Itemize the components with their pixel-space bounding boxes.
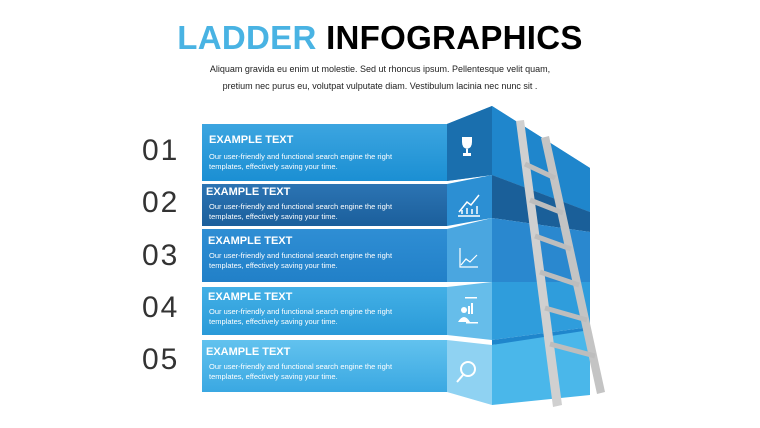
block 5: [447, 330, 590, 405]
bar 5: templates, effectively saving your time.: [209, 372, 338, 381]
bar 5: EXAMPLE TEXT: [206, 346, 290, 358]
icon: trophy: [462, 137, 472, 156]
bar 4: [202, 287, 447, 335]
number 03: 03: [142, 239, 179, 272]
bar 3: EXAMPLE TEXT: [208, 235, 292, 247]
number 01: 01: [142, 134, 179, 167]
bar 3: [202, 229, 447, 282]
bar 4: EXAMPLE TEXT: [208, 291, 292, 303]
bar 1: templates, effectively saving your time.: [209, 162, 338, 171]
ladder: [516, 120, 605, 407]
subtitle: Aliquam gravida eu enim ut molestie. Sed ut rhoncus ipsum. Pellentesque velit quam,: [210, 64, 550, 74]
bar 2: [202, 184, 447, 226]
bar 3: Our user-friendly and functional search engine the right: [209, 251, 392, 260]
icon: presenter: [458, 297, 478, 324]
subtitle: [210, 64, 550, 91]
block 2: [447, 175, 590, 232]
number 04: 04: [142, 291, 179, 324]
bar 1: [202, 124, 447, 181]
icon: line chart: [460, 248, 478, 267]
bar 4: Our user-friendly and functional search engine the right: [209, 307, 392, 316]
block 4: [447, 282, 590, 345]
subtitle: pretium nec purus eu, volutpat vulputate diam. Vestibulum lacinia nec nunc sit .: [223, 81, 537, 91]
bar 1: Our user-friendly and functional search engine the right: [209, 152, 392, 161]
number 02: 02: [142, 186, 179, 219]
bar 2: templates, effectively saving your time.: [209, 212, 338, 221]
bar 2: Our user-friendly and functional search engine the right: [209, 202, 392, 211]
block 1: [447, 106, 590, 212]
number 05: 05: [142, 343, 179, 376]
bar 2: EXAMPLE TEXT: [206, 186, 290, 198]
icon: magnifier: [457, 362, 475, 382]
bar 5: [202, 340, 447, 392]
block 3: [447, 218, 590, 282]
bar 1: EXAMPLE TEXT: [209, 134, 293, 146]
bar 3: templates, effectively saving your time.: [209, 261, 338, 270]
bar 4: templates, effectively saving your time.: [209, 317, 338, 326]
bar 5: Our user-friendly and functional search engine the right: [209, 362, 392, 371]
icon: growth chart: [458, 195, 480, 216]
title: LADDER INFOGRAPHICS: [177, 19, 583, 56]
